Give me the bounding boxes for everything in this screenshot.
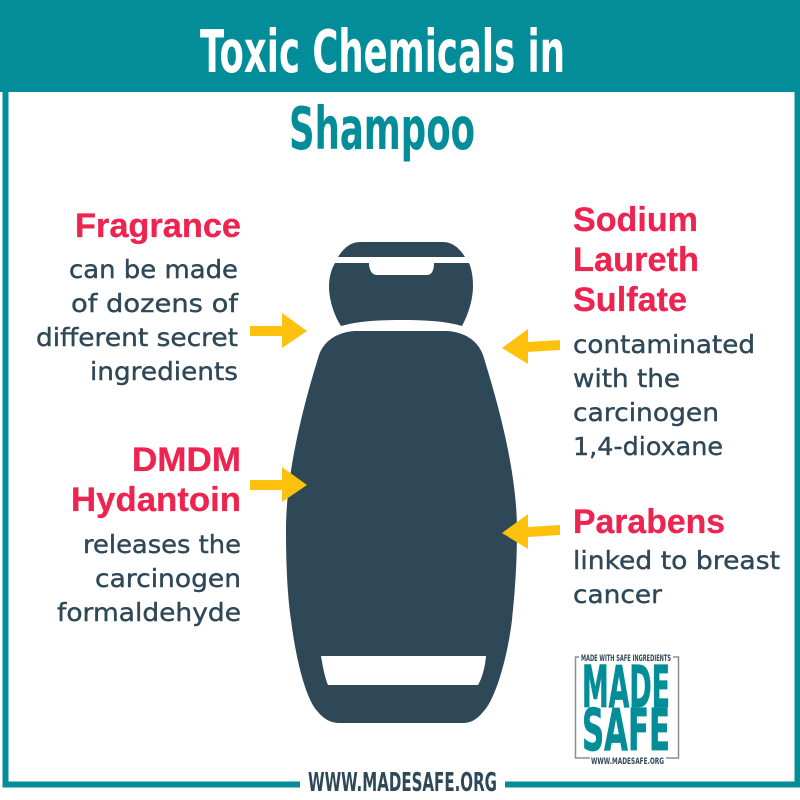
text: parabens: linked to breast (573, 546, 780, 575)
text: sodium laureth sulfate: Sulfate (573, 281, 687, 319)
logo: made safe: MADE (582, 653, 670, 721)
text: parabens: Parabens (573, 503, 725, 541)
text: sodium laureth sulfate (573, 201, 755, 461)
footer url: WWW.MADESAFE.ORG (308, 768, 497, 798)
text: sodium laureth sulfate: with the (573, 364, 680, 393)
header band (0, 0, 800, 92)
text: sodium laureth sulfate: contaminated (573, 330, 755, 359)
text: fragrance: ingredients (90, 357, 238, 386)
text: dmdm hydantoin (57, 441, 241, 627)
logo: made safe: MADE WITH SAFE INGREDIENTS (581, 654, 671, 664)
text: parabens (573, 503, 780, 609)
text: parabens: cancer (573, 580, 663, 609)
logo: made safe: WWW.MADESAFE.ORG (591, 757, 664, 767)
arrow: fragrance (250, 313, 307, 348)
footer url (300, 768, 505, 800)
text: fragrance: of dozens of (71, 289, 239, 318)
text: fragrance (36, 207, 241, 386)
text: dmdm hydantoin: formaldehyde (57, 598, 241, 627)
logo: made safe (576, 653, 678, 767)
arrow: dmdm hydantoin (250, 467, 307, 502)
text: fragrance: can be made (69, 255, 238, 284)
title line two: Shampoo (289, 94, 475, 163)
text: sodium laureth sulfate: Laureth (573, 241, 699, 279)
text: fragrance: different secret (36, 323, 238, 352)
text: sodium laureth sulfate: 1,4-dioxane (573, 432, 723, 461)
text: dmdm hydantoin: DMDM (132, 441, 241, 479)
text: dmdm hydantoin: Hydantoin (71, 481, 241, 519)
text: fragrance: Fragrance (75, 207, 241, 245)
text: sodium laureth sulfate: carcinogen (573, 398, 719, 427)
text: sodium laureth sulfate: Sodium (573, 201, 698, 239)
text: dmdm hydantoin: releases the (83, 530, 241, 559)
icon: shampoo bottle (286, 242, 517, 723)
title line one: Toxic Chemicals in (200, 17, 565, 86)
text: dmdm hydantoin: carcinogen (95, 564, 241, 593)
logo: made safe: SAFE (582, 696, 670, 764)
arrow: sodium laureth sulfate (502, 329, 560, 364)
arrow: parabens (502, 514, 560, 549)
